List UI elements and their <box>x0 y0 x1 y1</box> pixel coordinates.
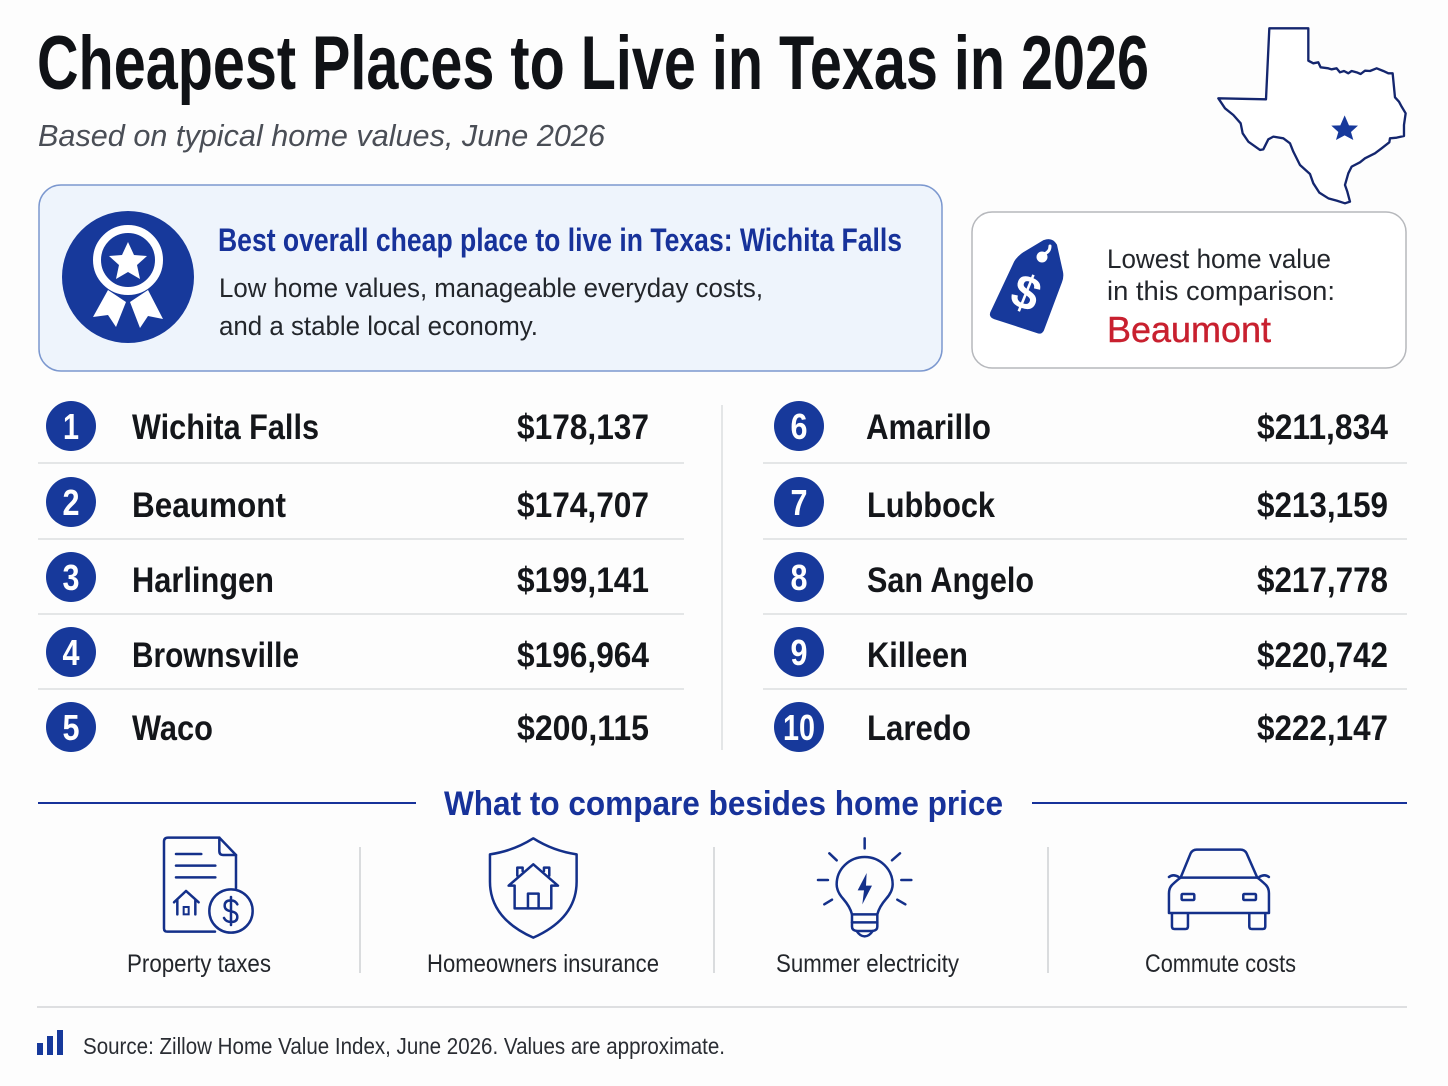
callout text <box>1107 244 1335 306</box>
row 7: Lubbock <box>867 486 995 525</box>
row 6: 6 <box>790 406 808 447</box>
item: summer electricity <box>776 838 959 978</box>
icon: car front <box>1169 850 1269 929</box>
label: Summer electricity <box>776 950 959 978</box>
row 8: San Angelo <box>867 561 1034 600</box>
row 5: Waco <box>132 709 213 748</box>
row 6 <box>774 401 1388 451</box>
row 3: 3 <box>62 557 80 598</box>
row 1 <box>46 401 649 451</box>
row 7 <box>774 477 1388 527</box>
row 7: 7 <box>790 482 808 523</box>
row 6: Amarillo <box>866 408 991 447</box>
callout text <box>219 273 763 341</box>
row 4: $196,964 <box>517 636 649 675</box>
icon: Texas map with star <box>1218 28 1406 203</box>
row 2: Beaumont <box>132 486 286 525</box>
callout value: Beaumont <box>1107 309 1271 350</box>
icon: shield with house <box>490 838 577 938</box>
item: commute costs <box>1145 850 1296 978</box>
row 10: 10 <box>783 707 815 748</box>
footer source <box>37 1030 725 1059</box>
section heading: What to compare besides home price <box>444 785 1003 823</box>
row 8 <box>774 552 1388 602</box>
row 5: $200,115 <box>517 709 649 748</box>
callout text: and a stable local economy. <box>219 311 538 341</box>
row 4: 4 <box>62 632 80 673</box>
row 10: $222,147 <box>1257 709 1388 748</box>
row 8: $217,778 <box>1257 561 1388 600</box>
source text: Source: Zillow Home Value Index, June 2026. Values are approximate. <box>83 1033 725 1059</box>
icon: award medal <box>62 211 194 343</box>
item: homeowners insurance <box>427 838 659 978</box>
row 3 <box>46 552 649 602</box>
row 3: $199,141 <box>517 561 649 600</box>
row 5 <box>46 702 649 752</box>
callout heading: Best overall cheap place to live in Texas: Wichita Falls <box>218 222 902 258</box>
row 9: $220,742 <box>1257 636 1388 675</box>
ranking list: right column <box>763 401 1407 752</box>
row 10 <box>774 702 1388 752</box>
label: Commute costs <box>1145 950 1296 978</box>
row 1: 1 <box>63 406 79 447</box>
row 6: $211,834 <box>1257 408 1388 447</box>
row 4: Brownsville <box>132 636 299 675</box>
callout text: Lowest home value <box>1107 244 1331 274</box>
subtitle: Based on typical home values, June 2026 <box>38 118 606 153</box>
callout text: in this comparison: <box>1107 276 1335 306</box>
icon: price tag: $ <box>1004 264 1048 323</box>
row 9 <box>774 627 1388 677</box>
row 1: Wichita Falls <box>132 408 319 447</box>
row 7: $213,159 <box>1257 486 1388 525</box>
icon: bar chart <box>37 1030 63 1055</box>
row 2 <box>46 477 649 527</box>
panel: best overall <box>39 185 942 371</box>
icon: tax document <box>164 838 253 933</box>
label: Homeowners insurance <box>427 950 659 978</box>
label: Property taxes <box>127 950 271 978</box>
icon: price tag <box>991 240 1062 333</box>
row 5: 5 <box>62 707 80 748</box>
row 2: 2 <box>62 482 80 523</box>
callout text: Low home values, manageable everyday costs, <box>219 273 763 303</box>
row 1: $178,137 <box>517 408 649 447</box>
row 3: Harlingen <box>132 561 274 600</box>
row 2: $174,707 <box>517 486 649 525</box>
row 10: Laredo <box>867 709 971 748</box>
panel: lowest home value <box>972 212 1406 368</box>
row 9: 9 <box>790 632 808 673</box>
icon: light bulb <box>818 838 911 936</box>
item: property taxes <box>127 838 271 978</box>
ranking list: left column <box>38 401 684 752</box>
row 9: Killeen <box>867 636 968 675</box>
row 8: 8 <box>790 557 808 598</box>
row 4 <box>46 627 649 677</box>
